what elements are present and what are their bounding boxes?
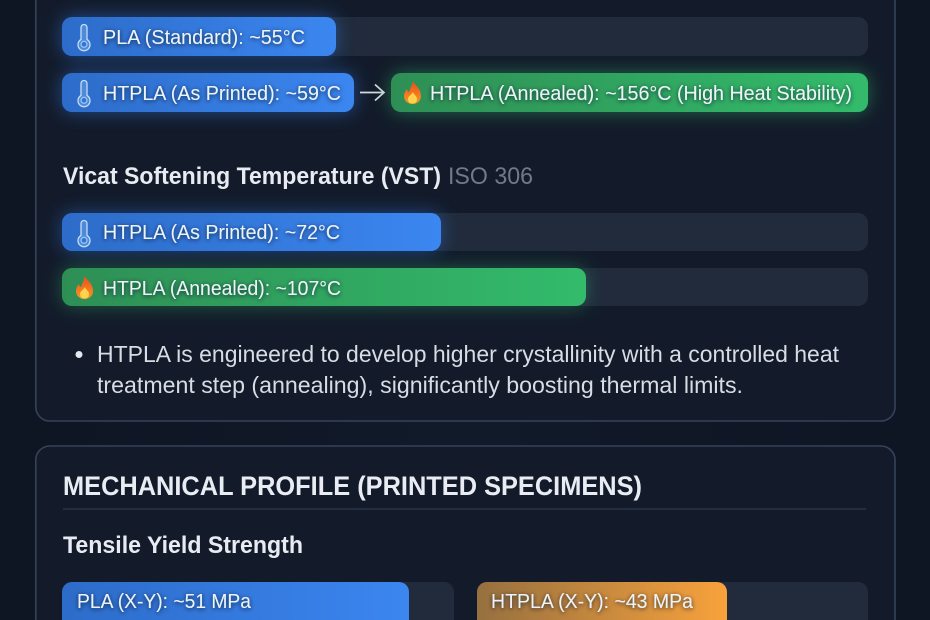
bar: PLA tensile yield: PLA (X-Y): ~51 MPa xyxy=(77,590,252,613)
bullet note: crystallinity: treatment step (annealing), significantly boosting thermal limits. xyxy=(97,372,743,398)
heading: mechanical profile: MECHANICAL PROFILE (PRINTED SPECIMENS) xyxy=(63,471,642,501)
bar: HTPLA tensile yield: HTPLA (X-Y): ~43 MPa xyxy=(491,590,694,613)
bar: HTPLA as printed VST: HTPLA (As Printed): ~72°C xyxy=(103,221,340,244)
icon: flame xyxy=(404,81,421,104)
arrow: as printed to annealed xyxy=(360,84,384,100)
heading note: ISO 306: ISO 306 xyxy=(448,163,533,190)
bar: PLA standard HDT: PLA (Standard): ~55°C xyxy=(103,26,305,49)
bar: HTPLA annealed HDT: HTPLA (Annealed): ~156°C (High Heat Stability) xyxy=(430,82,852,105)
heading: tensile yield strength: Tensile Yield Strength xyxy=(63,532,303,559)
bullet note: crystallinity: HTPLA is engineered to develop higher crystallinity with a controlled heat xyxy=(97,341,839,367)
panel: thermal profile xyxy=(36,0,895,421)
icon: thermometer xyxy=(78,220,90,247)
bar: PLA standard HDT xyxy=(62,17,868,56)
icon: thermometer xyxy=(78,80,90,107)
icon: flame xyxy=(76,276,93,299)
bullet note: crystallinity xyxy=(76,341,839,398)
bar: HTPLA as printed HDT xyxy=(62,73,354,112)
bar: HTPLA as printed VST xyxy=(62,213,868,251)
bar: HTPLA annealed VST: HTPLA (Annealed): ~107°C xyxy=(103,277,341,300)
icon: thermometer xyxy=(78,24,90,51)
heading: Vicat softening temperature: Vicat Softening Temperature (VST) xyxy=(63,163,441,190)
bar: HTPLA tensile yield xyxy=(477,582,868,620)
bar: PLA tensile yield xyxy=(62,582,454,620)
bar: HTPLA as printed HDT: HTPLA (As Printed): ~59°C xyxy=(103,82,341,105)
bar: HTPLA annealed VST xyxy=(62,268,868,306)
panel: mechanical profile xyxy=(36,446,895,620)
bar: HTPLA annealed HDT xyxy=(391,73,868,112)
